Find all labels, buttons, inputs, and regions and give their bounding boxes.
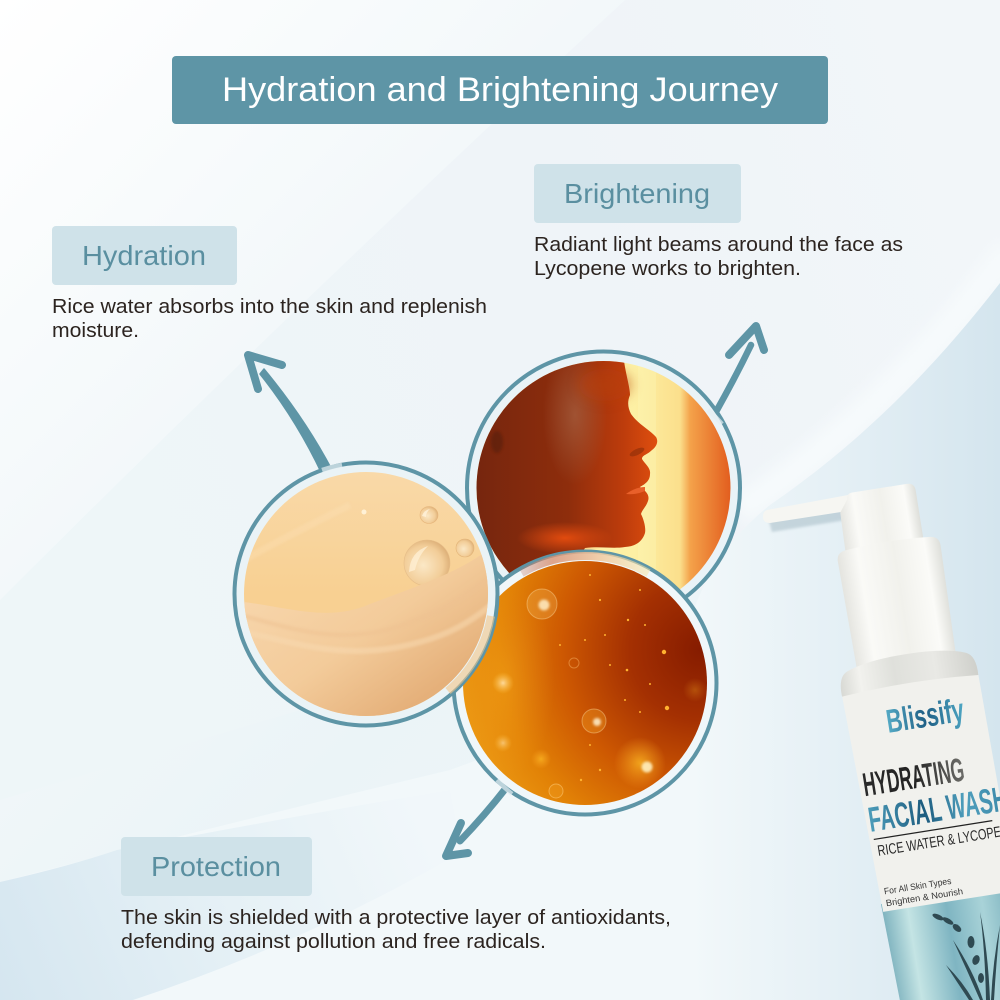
hydration heading: Hydration xyxy=(82,240,206,271)
hydration text: Rice water absorbs into the skin and replenish xyxy=(52,296,487,318)
brightening text: Lycopene works to brighten. xyxy=(534,258,801,280)
protection heading xyxy=(121,837,312,896)
title banner xyxy=(172,56,828,124)
hydration text xyxy=(52,296,487,342)
brightening heading: Brightening xyxy=(564,178,710,209)
title banner: Hydration and Brightening Journey xyxy=(222,71,778,109)
brightening text xyxy=(534,234,903,280)
pump stem xyxy=(836,483,924,555)
sparkle dots xyxy=(559,574,669,781)
teal tube xyxy=(881,882,1000,1000)
arrow: protection xyxy=(446,788,506,856)
shoulder xyxy=(837,643,978,697)
nozzle shadow xyxy=(768,506,846,532)
protection heading: Protection xyxy=(151,851,281,882)
arrow: brightening xyxy=(717,326,764,410)
protection text xyxy=(121,907,671,953)
ring highlights xyxy=(322,410,722,794)
protection text: defending against pollution and free radicals. xyxy=(121,931,546,953)
brightening heading xyxy=(534,164,741,223)
face silhouette xyxy=(476,361,658,574)
brightening text: Radiant light beams around the face as xyxy=(534,234,903,256)
white label xyxy=(841,670,1000,913)
pump nozzle xyxy=(763,490,886,524)
hydration heading xyxy=(52,226,237,285)
product bottle: Brighten & Nourish xyxy=(885,886,964,908)
arrow: hydration xyxy=(248,355,332,474)
image circle: protection xyxy=(454,552,716,814)
hydration text: moisture. xyxy=(52,320,139,342)
product bottle: For All Skin Types xyxy=(883,876,952,896)
image circle: brightening xyxy=(467,345,740,624)
protection text: The skin is shielded with a protective layer of antioxidants, xyxy=(121,907,671,929)
bubbles xyxy=(492,589,707,798)
pump collar xyxy=(836,533,958,670)
droplets xyxy=(362,506,474,586)
product bottle xyxy=(763,475,1000,1000)
liquid wave xyxy=(244,548,490,720)
image circle: hydration xyxy=(234,462,498,726)
rice plant xyxy=(932,912,1000,1000)
